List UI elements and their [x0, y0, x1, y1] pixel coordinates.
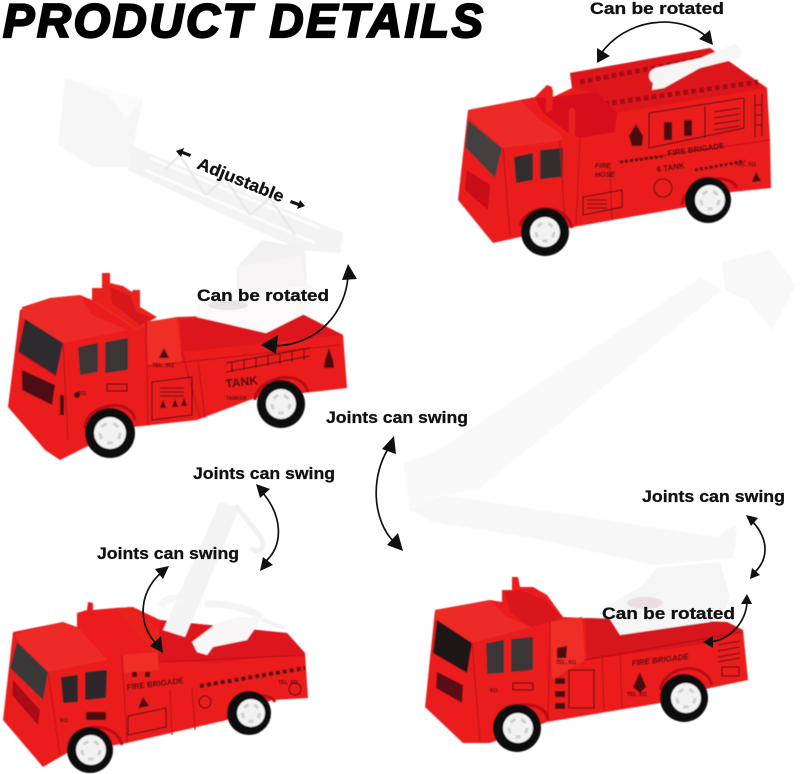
label: joints can swing, centre: Joints can swing: [326, 408, 468, 427]
grille: [436, 672, 463, 703]
side windows: [62, 671, 106, 702]
rear wheel: [227, 691, 271, 735]
panel lines: [472, 622, 743, 740]
grille: [12, 680, 40, 725]
decals: TEL. 911: [152, 363, 174, 369]
long slab: [115, 607, 172, 657]
side windows: [487, 638, 532, 673]
rear upright: [92, 273, 157, 330]
truck: crane truck lower left: [3, 502, 308, 773]
arrow: adjustable left: [176, 148, 191, 157]
label: can be rotated, boom truck: Can be rotated: [602, 604, 735, 623]
front wheel: [67, 727, 113, 773]
rear wheel: [257, 380, 305, 428]
label: adjustable: Adjustable: [195, 154, 287, 206]
arrow: joint swing, crane tip: [256, 484, 278, 571]
chassis: [3, 602, 308, 767]
chassis: [8, 295, 347, 460]
bed top: [180, 313, 343, 352]
decals: TEL. 911: [736, 162, 757, 168]
cab roof: [15, 622, 107, 672]
windshield: [10, 642, 48, 700]
decals: FIRE BRIGADE: [631, 652, 690, 668]
panel lines: [503, 138, 770, 235]
decals: [490, 641, 740, 709]
rear post near cab: [546, 86, 553, 113]
deck ladders: [580, 58, 758, 104]
decals: FIRE: [595, 163, 611, 170]
label: joints can swing, boom: Joints can swing: [642, 487, 785, 506]
arrow: rotation, boom truck: [703, 594, 752, 648]
open compartment: [535, 92, 617, 138]
wheel arches: [70, 696, 275, 745]
arrow: joint swing, crane base: [143, 566, 169, 653]
side locker: [146, 317, 182, 366]
decals: TEL. 911: [627, 692, 648, 698]
rear upright shade: [505, 590, 562, 627]
chassis: [425, 577, 748, 743]
cab roof: [468, 100, 563, 148]
panel lines: [18, 322, 340, 440]
windshield: [465, 120, 502, 178]
white crane arm and base: [161, 502, 285, 655]
white boom arms and bucket: [403, 250, 796, 625]
side windows: [79, 339, 127, 374]
side windows: [515, 149, 562, 182]
wheel arches: [85, 377, 308, 428]
label: joints can swing, crane base: Joints can swing: [97, 544, 239, 563]
upright inner shade: [110, 287, 152, 325]
front wheel: [493, 704, 541, 752]
wheel arches: [497, 669, 712, 722]
decals: 911: [60, 718, 68, 724]
truck: boom truck lower right: [403, 250, 796, 752]
cab roof: [435, 600, 532, 643]
rear post near locker: [569, 107, 575, 136]
arrow: joint swing, centre: [376, 436, 403, 551]
truck: ladder truck upper left: [8, 78, 347, 460]
decals: TEL. 911: [278, 680, 299, 686]
grille: [22, 370, 55, 405]
label: adjustable: [176, 148, 305, 209]
white turret base: [603, 562, 730, 635]
white turret: [197, 255, 312, 333]
chassis: [458, 48, 771, 243]
arrow: rotation, top truck: [597, 22, 713, 63]
bed stripes: [585, 618, 743, 660]
panel lines: [48, 655, 305, 755]
decals: FIRE BRIGADE: [126, 676, 185, 692]
decals: [60, 668, 305, 735]
side locker: [123, 652, 159, 673]
decals: TANKER: [226, 396, 247, 402]
label: joints can swing, crane tip: Joints can swing: [193, 464, 335, 483]
rear wheel: [685, 177, 731, 223]
wheel arches: [520, 179, 737, 228]
arrow: joint swing, boom: [746, 515, 765, 579]
grille: [465, 170, 490, 210]
decals: [60, 348, 334, 420]
truck: hose truck upper right: [458, 44, 771, 256]
decals: TANK: [225, 373, 259, 391]
windshield: [433, 620, 472, 673]
decals: 911: [78, 391, 86, 397]
top deck: [570, 48, 767, 113]
decals: FIRE BRIGADE: [667, 141, 726, 158]
decals: HOSE: [595, 172, 615, 179]
side locker: [550, 617, 585, 680]
arrow: adjustable right: [290, 200, 305, 209]
rear wheel: [660, 674, 708, 722]
decals: TEL. 911: [556, 660, 577, 666]
white ladder and bucket: [58, 78, 343, 290]
bed top: [158, 620, 305, 663]
white hose nozzle: [649, 44, 742, 90]
decals: 6 TANK: [656, 161, 686, 174]
label: can be rotated, left truck: Can be rotated: [197, 286, 329, 305]
cab roof: [22, 295, 128, 343]
windshield: [18, 319, 63, 376]
front wheel: [521, 208, 569, 256]
decals: 911: [490, 688, 498, 694]
arrow: rotation, left truck: [261, 264, 357, 354]
front wheel: [85, 408, 135, 458]
decals: [583, 94, 762, 215]
turret recess: [627, 597, 663, 609]
